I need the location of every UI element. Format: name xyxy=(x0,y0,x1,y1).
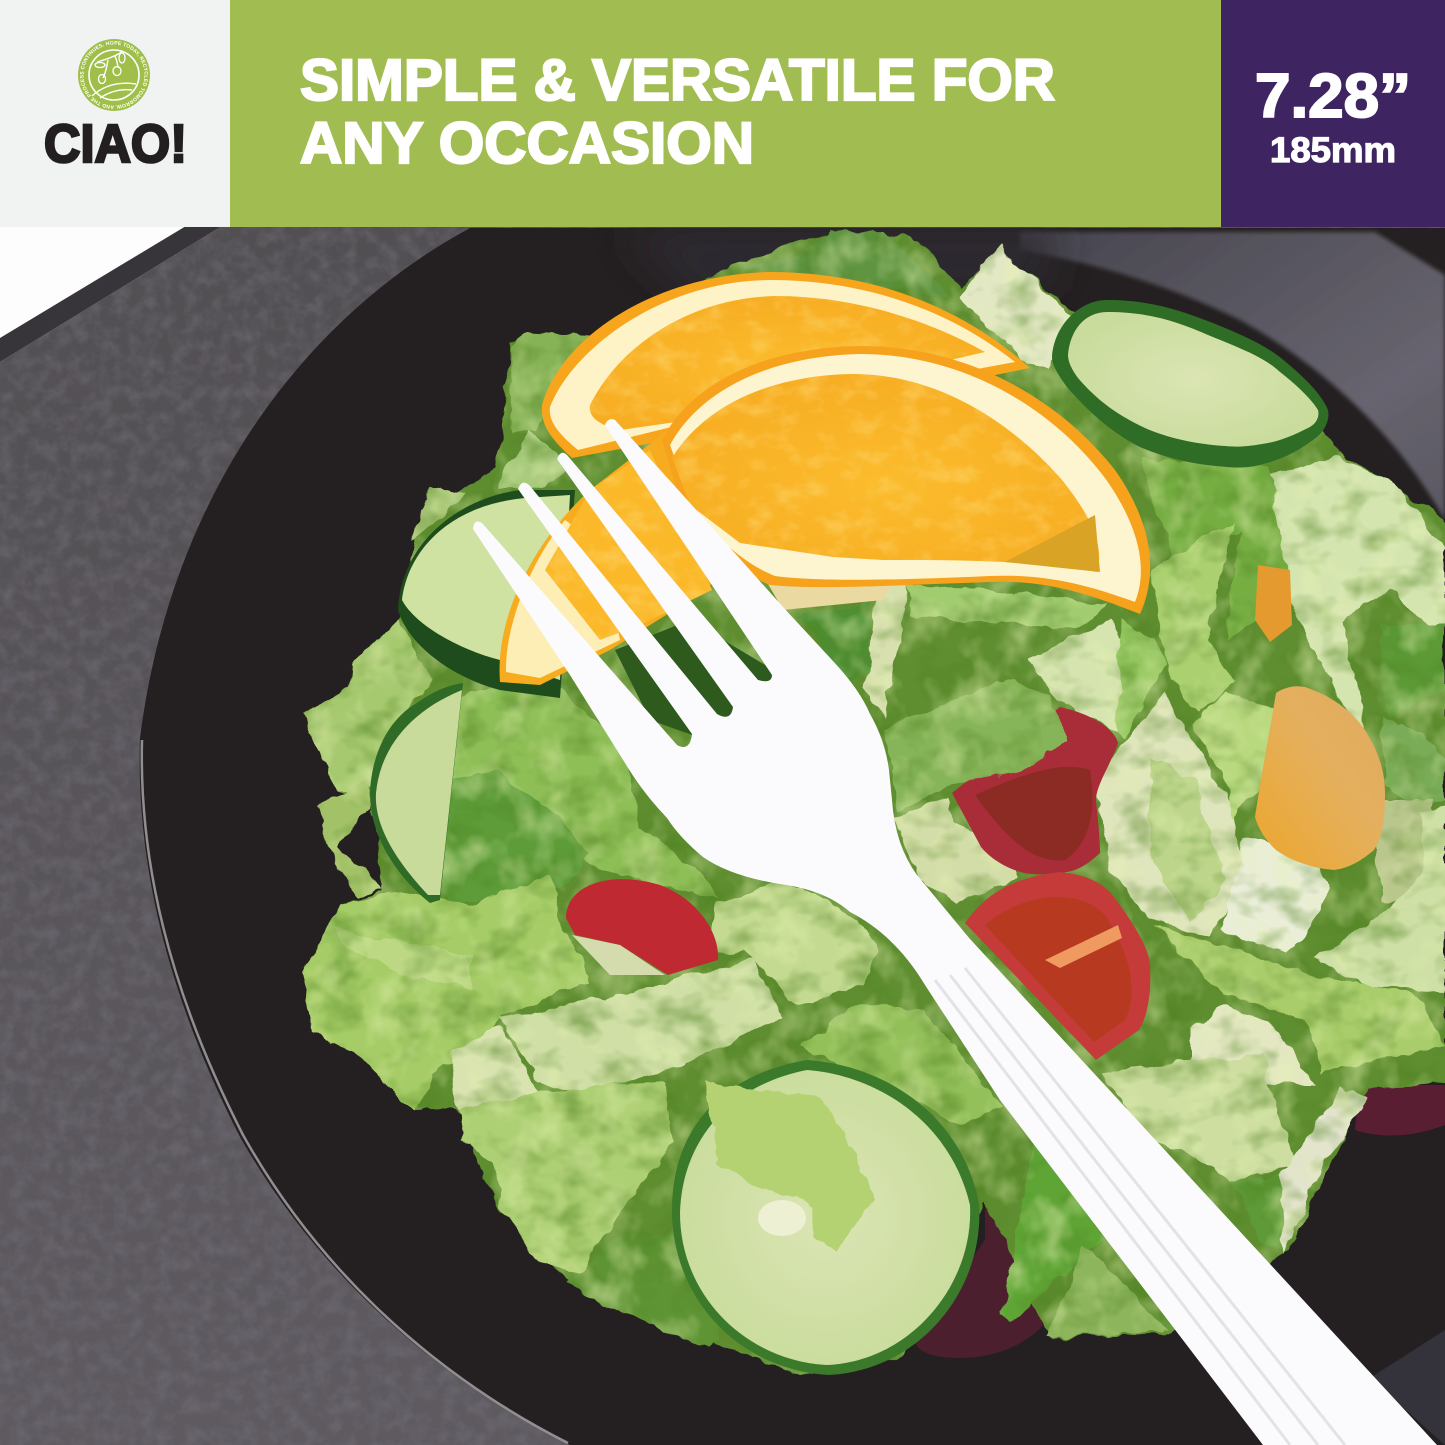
bottom cucumber xyxy=(672,1060,979,1375)
front orange slice xyxy=(662,346,1150,614)
dark central lettuce xyxy=(430,770,590,905)
lettuce pieces xyxy=(303,228,1445,1347)
small yellow tomato xyxy=(1255,565,1292,642)
bottom green xyxy=(1230,1175,1285,1250)
onion bottom center xyxy=(915,1160,1060,1358)
cut tomato upper xyxy=(952,707,1118,874)
header: size panel xyxy=(1221,0,1445,227)
cherry tomato left xyxy=(566,879,718,975)
white paper corner xyxy=(0,226,222,362)
white lettuce leaf xyxy=(1089,693,1246,937)
white leaf green centre xyxy=(1150,760,1225,920)
bowl top soft shade xyxy=(620,228,1060,300)
lower left fold xyxy=(335,930,470,988)
left outer lettuce xyxy=(303,620,432,790)
lettuce above lower cucumber base xyxy=(800,1005,1003,1125)
middle left cucumber xyxy=(370,683,463,903)
pale curled strip xyxy=(865,570,910,720)
title: SIMPLE & VERSATILE FOR xyxy=(300,48,1055,113)
right side green xyxy=(1381,717,1445,807)
bottom right white leaf xyxy=(1278,1090,1366,1255)
title: ANY OCCASION xyxy=(300,111,754,176)
bottom right pale leaf xyxy=(1102,1055,1297,1180)
top pale lettuce xyxy=(960,245,1072,370)
top right cucumber xyxy=(1052,300,1328,468)
lettuce by fork tip xyxy=(495,432,570,490)
fork body xyxy=(473,419,1437,1445)
tomatoes xyxy=(566,565,1385,1060)
lettuce under orange xyxy=(908,585,1110,630)
left lower frill xyxy=(318,780,383,896)
bowl upper right light xyxy=(1020,232,1445,520)
small lettuce left of head xyxy=(800,605,870,690)
bottom-left large lettuce xyxy=(457,1083,673,1273)
leaf on cucumber xyxy=(705,1083,875,1253)
header: title band xyxy=(230,0,1221,227)
far right pale xyxy=(1312,807,1445,993)
logo wordmark: CIAO! xyxy=(44,114,187,174)
title xyxy=(300,48,1055,176)
central lettuce under fork xyxy=(440,685,720,900)
left upper lettuce xyxy=(510,332,590,434)
cut tomato lower xyxy=(965,872,1150,1060)
left cucumber behind fork xyxy=(398,490,575,698)
size in inches: 7.28” xyxy=(1255,62,1411,131)
small top left lettuce xyxy=(412,486,465,540)
black bowl xyxy=(140,228,1445,1445)
mid lettuce right of tomato xyxy=(715,880,880,1008)
cucumber slices xyxy=(370,300,1328,1375)
leaf near cherry tomato xyxy=(894,797,1017,903)
cucumber seeds xyxy=(758,1200,806,1236)
pale green curled lettuce xyxy=(1150,522,1235,712)
dark gap behind fork tines xyxy=(615,620,790,745)
olive hollow xyxy=(1374,800,1431,903)
red onion pieces xyxy=(915,1085,1445,1358)
header: logo panel xyxy=(0,0,230,227)
upper right pale frill xyxy=(1270,455,1445,740)
leaf over upper tomato xyxy=(884,678,1064,810)
salad base xyxy=(303,230,1445,1375)
bottom leaf back xyxy=(1045,1245,1165,1340)
paper shadow edge xyxy=(0,226,222,362)
bright bottom leaf xyxy=(1002,1135,1105,1320)
logo badge: AND THE PROCESS CONTINUES. HOPE TODAY, RECYCLED TOMORROW. xyxy=(80,41,148,109)
bottom dark lettuce xyxy=(568,1233,721,1347)
bowl lower right rim xyxy=(1370,1330,1445,1445)
pale chunk near ribbon xyxy=(450,1025,539,1110)
size in millimetres: 185mm xyxy=(1270,131,1396,170)
top lettuce xyxy=(735,228,950,298)
right leaf top xyxy=(1380,625,1445,715)
pale center chunk xyxy=(1028,620,1121,730)
lower left lettuce clump xyxy=(303,875,590,1112)
back orange slice xyxy=(542,272,1030,458)
bright long leaf xyxy=(1154,927,1445,1073)
white plastic fork xyxy=(473,419,1437,1445)
bottom right beige xyxy=(1190,1005,1315,1085)
onion right xyxy=(1355,1085,1445,1135)
bright leaf next to yellow tomato xyxy=(1192,690,1293,820)
handle ridges xyxy=(935,968,1345,1445)
pale ribbon lettuce xyxy=(498,957,782,1095)
bowl rim highlight xyxy=(142,740,568,1443)
bright green strip xyxy=(1118,620,1165,737)
upper right green frill xyxy=(1140,460,1290,640)
yellow tomato xyxy=(1255,686,1385,870)
left orange slice behind fork xyxy=(500,430,730,685)
white chunk xyxy=(1222,837,1330,953)
orange slices xyxy=(500,272,1150,685)
